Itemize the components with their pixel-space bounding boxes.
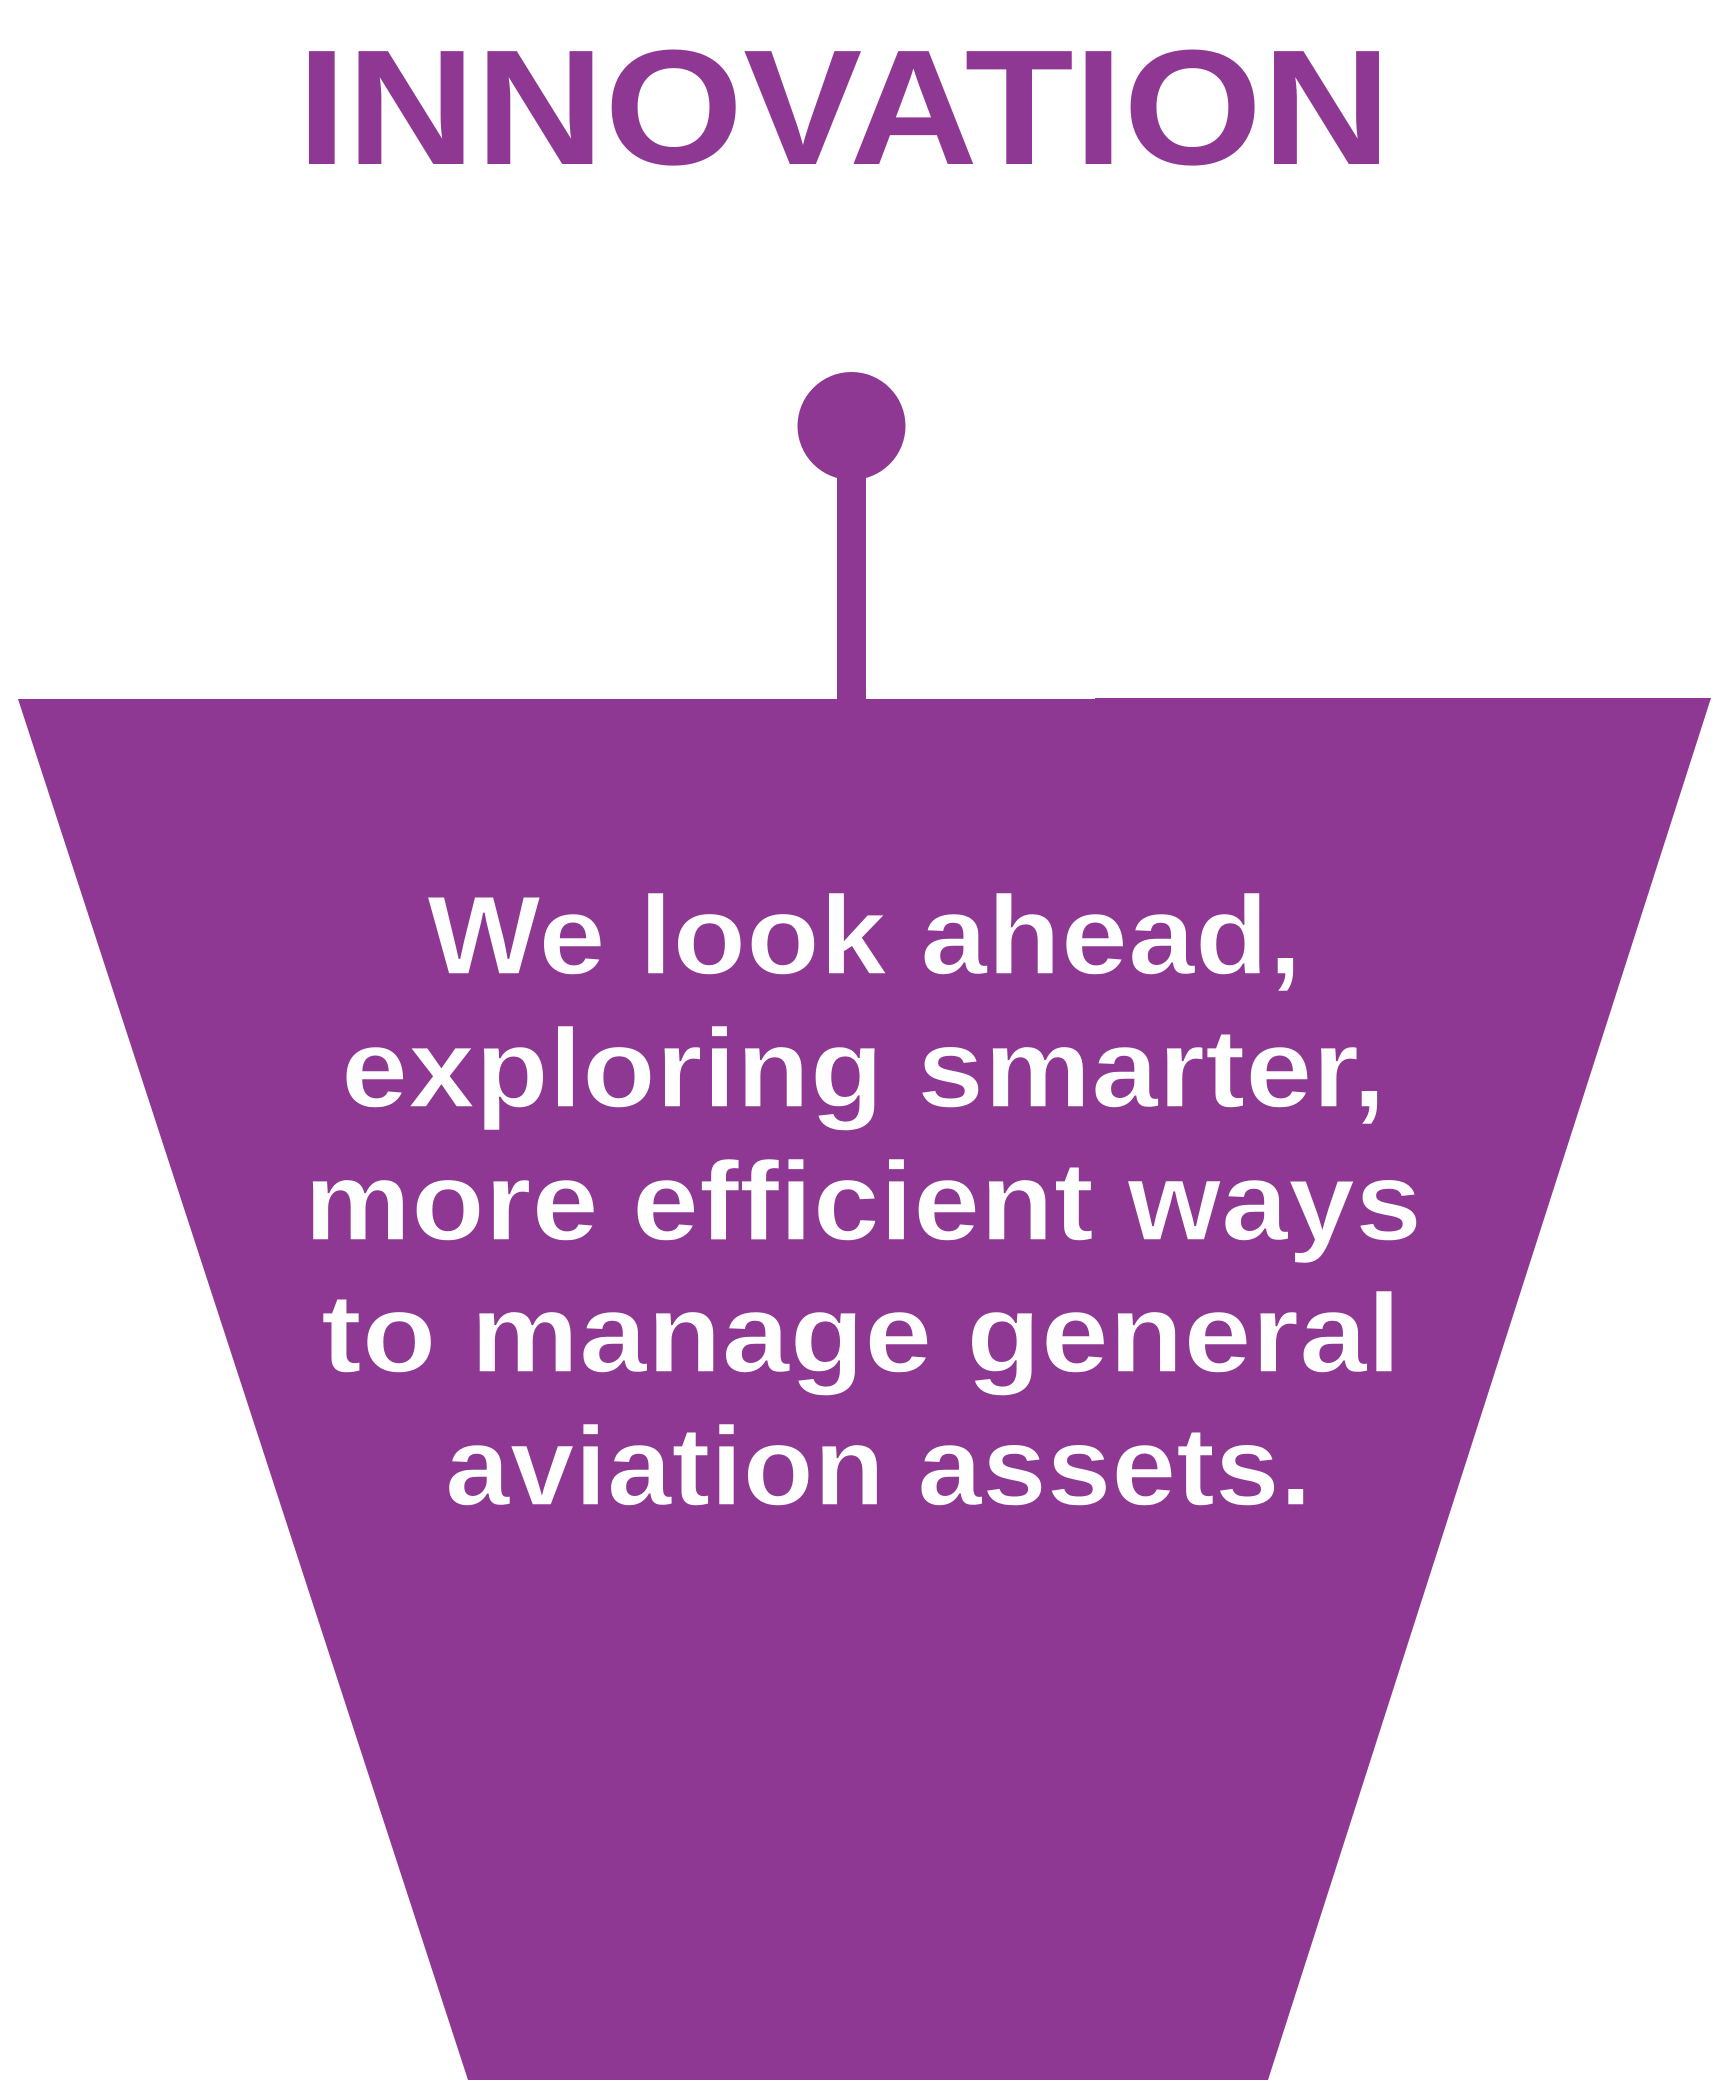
- text block: innovation description: to manage general: [321, 1271, 1401, 1396]
- text block: innovation description: exploring smarter,: [341, 1006, 1386, 1131]
- panel: inverted trapezoid: [18, 698, 1711, 2080]
- icon: pin with round head and stem: [798, 372, 906, 702]
- title: INNOVATION: [297, 16, 1391, 199]
- text block: innovation description: [304, 873, 1422, 1529]
- text block: innovation description: We look ahead,: [427, 873, 1302, 998]
- text block: innovation description: aviation assets.: [445, 1404, 1312, 1529]
- text block: innovation description: more efficient ways: [304, 1139, 1422, 1264]
